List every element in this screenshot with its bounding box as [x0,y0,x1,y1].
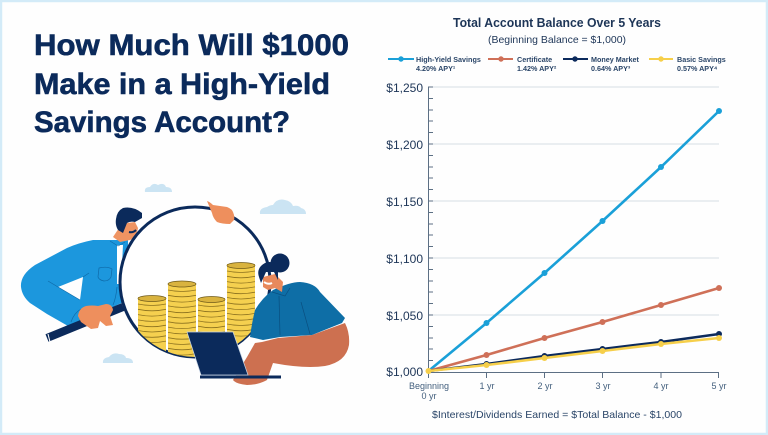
x axis labels: 5 yr [711,381,727,391]
legend item: high-yield savings: High-Yield Savings [416,55,481,64]
y axis labels: $1,000 [386,365,423,379]
legend item: certificate [488,55,557,73]
legend item: certificate: 1.42% APY² [517,64,557,73]
icon: hand on top of lens [207,201,234,224]
line chart [386,81,727,401]
icon: woman in teal shirt [233,254,349,385]
y axis labels: $1,150 [386,195,423,209]
series: certificate [428,285,722,371]
y axis labels: $1,200 [386,138,423,152]
icon: laptop [187,332,281,378]
legend item: basic savings [649,55,726,73]
title [34,29,349,139]
illustration: people inspecting coins with a magnifying glass [21,184,349,385]
x axis labels: 1 yr [479,381,495,391]
grid and axes [428,87,719,378]
chart heading [453,16,661,46]
x axis labels: 3 yr [595,381,611,391]
legend item: high-yield savings: 4.20% APY¹ [416,64,456,73]
x axis labels: 0 yr [421,391,437,401]
icon: magnifying glass [47,207,270,357]
icon: man's hand on handle [78,304,113,329]
x axis labels [409,381,727,401]
icon: clouds [103,184,306,363]
legend item: money market [563,55,640,73]
y axis labels [386,81,423,379]
title: How Much Will $1000 [34,29,349,62]
icon: man in blue shirt [21,208,142,326]
y axis labels: $1,250 [386,81,423,95]
formula footnote: $Interest/Dividends Earned = $Total Balance - $1,000 [432,409,682,421]
legend item: high-yield savings [388,55,481,73]
legend item: money market: Money Market [591,55,640,64]
x axis labels: Beginning [409,381,449,391]
series: money market [428,331,722,371]
legend item: money market: 0.64% APY³ [591,64,631,73]
series: high-yield savings [428,108,722,371]
x axis labels: 4 yr [653,381,669,391]
x axis labels: 2 yr [537,381,553,391]
legend [388,55,726,73]
legend item: basic savings: Basic Savings [677,55,726,64]
title: Make in a High-Yield [34,68,330,101]
chart heading: (Beginning Balance = $1,000) [488,34,626,46]
chart heading: Total Account Balance Over 5 Years [453,16,661,30]
icon: coin stacks [138,262,255,359]
series: basic savings [426,335,722,374]
title: Savings Account? [34,106,290,139]
legend item: basic savings: 0.57% APY⁴ [677,64,718,73]
y axis labels: $1,050 [386,309,423,323]
y axis labels: $1,100 [386,252,423,266]
legend item: certificate: Certificate [517,55,552,64]
